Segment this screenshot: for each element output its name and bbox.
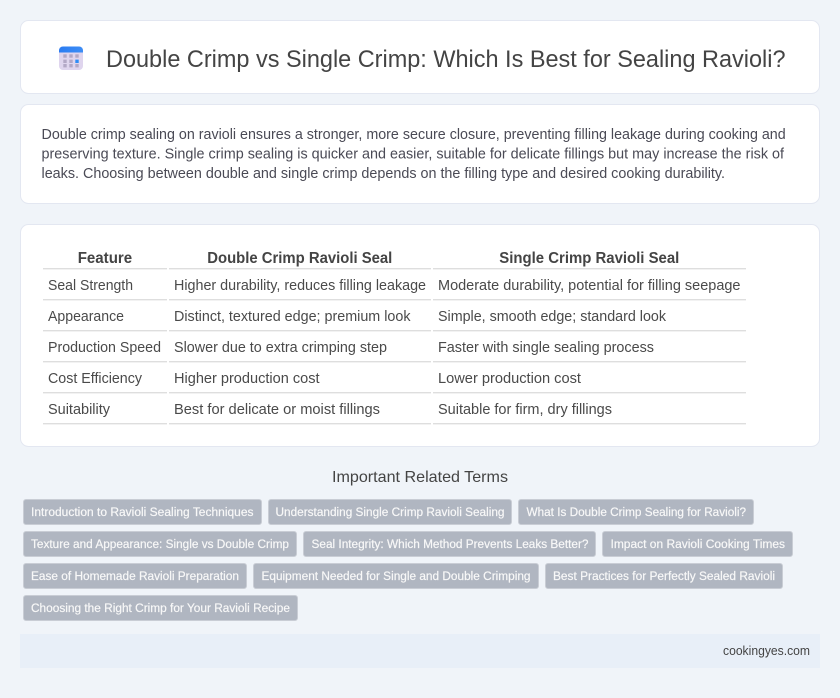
table rules	[43, 268, 746, 424]
row: appearance	[48, 309, 667, 325]
row: suitability: Suitability	[48, 402, 111, 418]
tag: What Is Double Crimp Sealing for Ravioli?	[526, 505, 746, 519]
tag	[518, 500, 754, 524]
icon: calendar	[59, 46, 83, 70]
description text: Double crimp sealing on ravioli ensures a stronger, more secure closure, preventing filling leakage during cooking and	[42, 127, 786, 143]
tag	[24, 596, 298, 620]
tag: Seal Integrity: Which Method Prevents Leaks Better?	[312, 537, 589, 551]
row: suitability: Suitable for firm, dry fillings	[438, 402, 612, 418]
tag: Ease of Homemade Ravioli Preparation	[31, 569, 239, 583]
row: production speed: Slower due to extra crimping step	[174, 340, 387, 356]
row: suitability	[48, 402, 612, 418]
row: seal strength: Moderate durability, potential for filling seepage	[438, 278, 740, 294]
tag	[304, 532, 596, 556]
row: appearance: Simple, smooth edge; standard look	[438, 309, 667, 325]
row: seal strength: Higher durability, reduces filling leakage	[174, 278, 426, 294]
heading: important related terms: Important Related Terms	[332, 469, 508, 486]
footer source text: cookingyes.com	[723, 643, 810, 658]
row: production speed: Production Speed	[48, 340, 161, 356]
panel: related term tags	[24, 500, 792, 620]
tag: Choosing the Right Crimp for Your Ravioli Recipe	[31, 601, 290, 615]
footer	[20, 634, 820, 668]
tag	[268, 500, 512, 524]
row: cost efficiency	[48, 371, 581, 387]
table header row: Single Crimp Ravioli Seal	[499, 250, 679, 267]
row: seal strength: Seal Strength	[48, 278, 133, 294]
row: appearance: Appearance	[48, 309, 124, 325]
panel: description	[20, 104, 820, 204]
row: cost efficiency: Cost Efficiency	[48, 371, 143, 387]
tag	[24, 532, 296, 556]
tag: Best Practices for Perfectly Sealed Ravioli	[553, 569, 775, 583]
table header row	[78, 250, 679, 267]
tag	[24, 564, 246, 588]
description text	[42, 127, 786, 182]
description text: preserving texture. Single crimp sealing is quicker and easier, suitable for delicate fillings but may increase the risk of	[42, 146, 785, 162]
tag	[254, 564, 538, 588]
tag: Equipment Needed for Single and Double Crimping	[262, 569, 530, 583]
row: production speed	[48, 340, 654, 356]
tag	[602, 532, 792, 556]
tag: Introduction to Ravioli Sealing Techniques	[31, 505, 254, 519]
tag	[546, 564, 782, 588]
panel: title header	[20, 20, 820, 94]
tag	[24, 500, 262, 524]
tag: Impact on Ravioli Cooking Times	[610, 537, 785, 551]
row: cost efficiency: Lower production cost	[438, 371, 581, 387]
panel: comparison table	[20, 224, 820, 446]
row: suitability: Best for delicate or moist fillings	[174, 402, 380, 418]
row: production speed: Faster with single sealing process	[438, 340, 654, 356]
tag: Understanding Single Crimp Ravioli Sealing	[276, 505, 504, 519]
row: cost efficiency: Higher production cost	[174, 371, 320, 387]
row: seal strength	[48, 278, 740, 294]
table header row: Feature	[78, 250, 133, 267]
description text: leaks. Choosing between double and single crimp depends on the filling type and desired cooking durability.	[42, 166, 725, 182]
row: appearance: Distinct, textured edge; premium look	[174, 309, 411, 325]
tag: Texture and Appearance: Single vs Double Crimp	[31, 537, 289, 551]
table header row: Double Crimp Ravioli Seal	[207, 250, 392, 267]
title: Double Crimp vs Single Crimp: Which Is Best for Sealing Ravioli?	[106, 46, 786, 73]
